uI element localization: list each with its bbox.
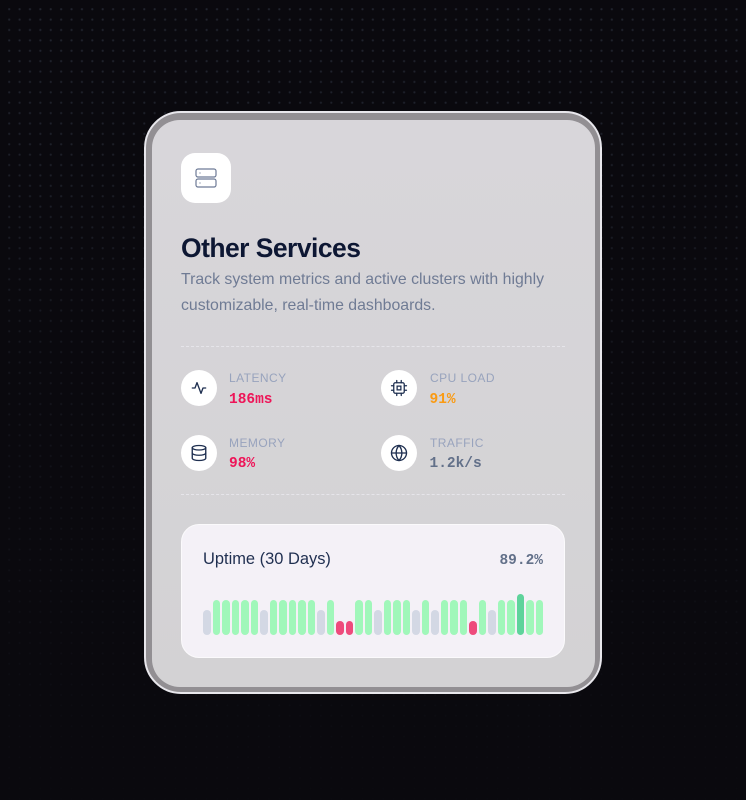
panel: uptime: [181, 524, 565, 658]
title: Other Services: [181, 233, 360, 263]
icon: globe: [381, 435, 417, 471]
memory value: 98%: [229, 456, 255, 472]
uptime percentage: 89.2%: [499, 552, 543, 568]
bar chart: [203, 594, 543, 635]
memory label: MEMORY: [229, 436, 285, 450]
traffic value: 1.2k/s: [430, 456, 482, 472]
icon: activity: [181, 370, 217, 406]
icon: database: [181, 435, 217, 471]
card frame: [144, 111, 602, 694]
metric: traffic: [381, 435, 484, 472]
cpu load label: CPU LOAD: [430, 371, 495, 385]
icon: cpu: [381, 370, 417, 406]
metric: cpu load: [381, 370, 495, 408]
latency value: 186ms: [229, 392, 273, 408]
cpu load value: 91%: [430, 392, 456, 408]
metric: memory: [181, 435, 285, 472]
latency label: LATENCY: [229, 371, 287, 385]
description: [181, 271, 544, 314]
dotted background: [8, 8, 746, 581]
description: customizable, real-time dashboards.: [181, 296, 436, 314]
uptime heading: Uptime (30 Days): [203, 550, 331, 568]
metric: latency: [181, 370, 287, 408]
description: Track system metrics and active clusters with highly: [181, 271, 544, 288]
icon: server: [181, 153, 231, 203]
traffic label: TRAFFIC: [430, 436, 484, 450]
card inner panel: [152, 120, 595, 687]
